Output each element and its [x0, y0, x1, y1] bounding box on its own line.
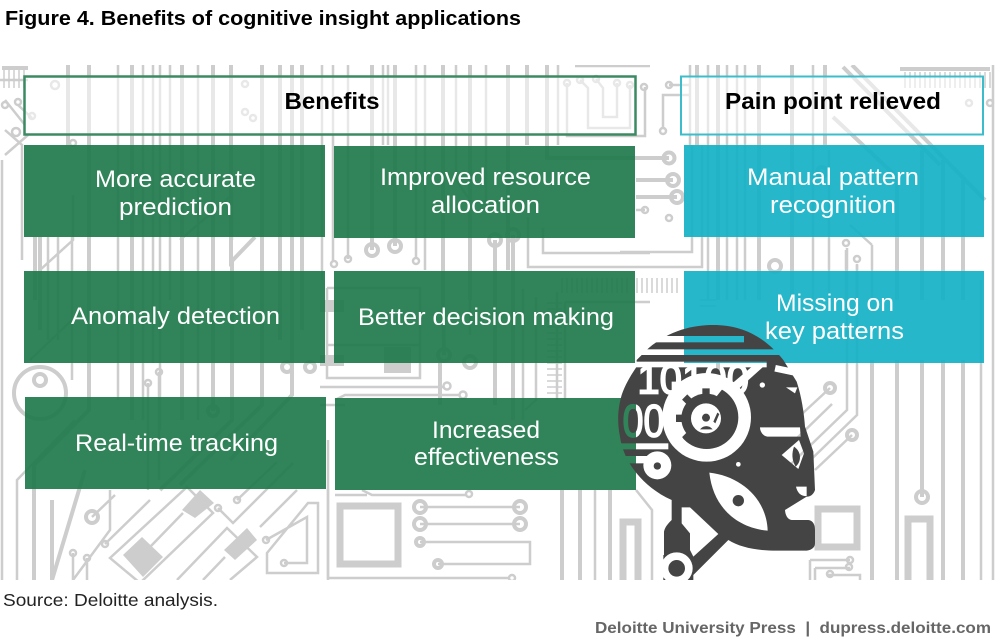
box: real-time tracking: Real-time tracking: [75, 430, 278, 457]
panel: pain point header: [681, 76, 983, 134]
panel: benefits header: [24, 76, 636, 134]
box: missing on key patterns: key patterns: [765, 318, 904, 345]
box: improved resource allocation: Improved resource: [380, 164, 591, 191]
box: more accurate prediction: More accurate: [95, 166, 256, 193]
box: better decision making: [334, 271, 635, 363]
title: Figure 4. Benefits of cognitive insight applications: [5, 8, 521, 30]
box: manual pattern recognition: Manual pattern: [747, 164, 919, 191]
chip square: [340, 506, 398, 564]
box: anomaly detection: Anomaly detection: [71, 303, 280, 330]
box: better decision making: Better decision making: [358, 304, 614, 331]
box: manual pattern recognition: [684, 145, 984, 237]
box: increased effectiveness: Increased: [432, 417, 540, 444]
panel: benefits header: Benefits: [284, 88, 380, 114]
box: missing on key patterns: Missing on: [776, 290, 894, 317]
box: more accurate prediction: [24, 145, 325, 237]
icon: robot head: [618, 325, 815, 580]
box: increased effectiveness: effectiveness: [414, 444, 559, 471]
box: increased effectiveness: [335, 398, 636, 490]
chip tall: [623, 522, 638, 580]
panel: pain point header: Pain point relieved: [725, 88, 941, 114]
box: more accurate prediction: prediction: [119, 194, 232, 221]
box: manual pattern recognition: recognition: [770, 192, 896, 219]
chip square right: [818, 509, 857, 547]
box: improved resource allocation: [334, 146, 635, 238]
box: anomaly detection: [24, 271, 325, 363]
box: real-time tracking: [25, 397, 326, 489]
source note: Source: Deloitte analysis.: [3, 590, 218, 610]
chip tall right: [908, 519, 930, 580]
box: improved resource allocation: allocation: [431, 192, 540, 219]
box: missing on key patterns: [684, 271, 984, 363]
circuit nodes: [14, 152, 928, 568]
footer credit: Deloitte University Press | dupress.deloitte.com: [595, 620, 991, 637]
